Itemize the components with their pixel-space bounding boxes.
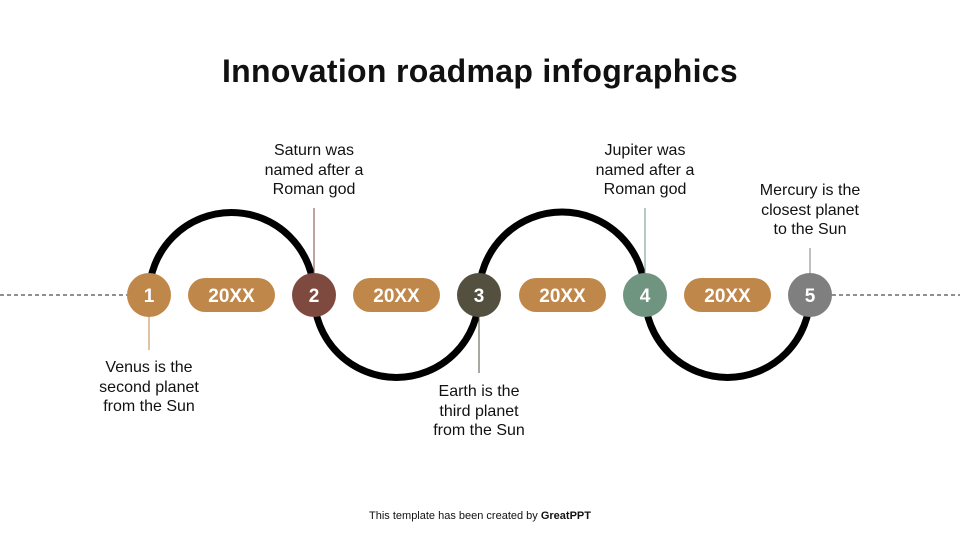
text: step 2: named after a <box>265 162 363 178</box>
roadmap diagram: 20XX <box>539 286 586 307</box>
text: step 4: Jupiter was <box>605 142 685 159</box>
connector lines <box>149 208 810 373</box>
wave path <box>149 212 810 377</box>
text: step 5: closest planet <box>761 202 859 218</box>
step circles: 5 <box>805 286 816 307</box>
step circles: 4 <box>640 286 651 307</box>
text: step 1 <box>99 359 199 415</box>
text: step 5 <box>760 182 860 238</box>
text: step 2: Saturn was <box>274 142 354 159</box>
roadmap diagram: 20XX <box>373 286 420 307</box>
text: step 4: Roman god <box>604 181 686 198</box>
step circles: 1 <box>144 286 155 307</box>
roadmap diagram: 20XX <box>208 286 255 307</box>
text: step 3: Earth is the <box>439 383 519 400</box>
step circles <box>127 273 832 317</box>
text: step 2: Roman god <box>273 181 355 198</box>
year pills <box>188 278 771 312</box>
step circles: 3 <box>474 286 484 307</box>
roadmap diagram: 20XX <box>704 286 751 307</box>
text: step 5: Mercury is the <box>760 182 860 199</box>
text: step 3: from the Sun <box>433 422 525 439</box>
title: Innovation roadmap infographics <box>222 53 738 89</box>
text: step 1: second planet <box>99 378 199 396</box>
text: step 3 <box>433 383 525 439</box>
text: step 1: from the Sun <box>103 398 195 415</box>
step circles: 2 <box>309 286 319 307</box>
text: step 1: Venus is the <box>105 359 193 376</box>
text: step 4: named after a <box>596 162 694 178</box>
text: step 4 <box>596 142 694 198</box>
footer: This template has been created by GreatPPT <box>369 510 591 522</box>
text: step 5: to the Sun <box>774 221 846 238</box>
text: step 3: third planet <box>439 402 519 420</box>
text: step 2 <box>265 142 364 198</box>
